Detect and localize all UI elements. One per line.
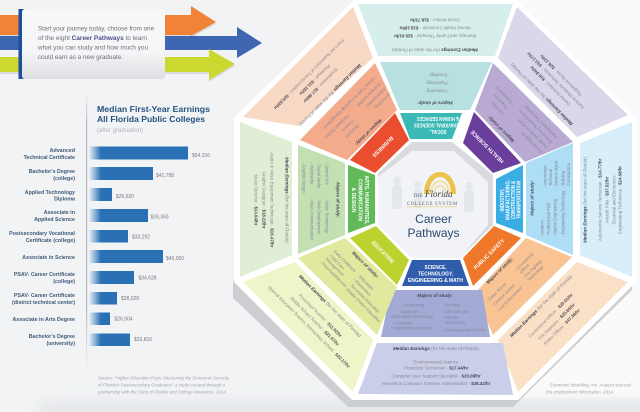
panel: arts, humanities, communication and design — [240, 122, 375, 277]
label: social — [414, 115, 462, 134]
earnings: science: Environmental Science — [414, 360, 459, 364]
majors: public safety: - Fire Fighting — [521, 258, 543, 280]
bar: associate in arts — [12, 312, 133, 325]
earnings: industry — [582, 157, 622, 243]
earnings: social: Median Earnings (for the state of Florida) — [392, 48, 478, 52]
label: public safety: PUBLIC SAFETY — [473, 238, 507, 271]
bar: applied technology diploma: $26,620 — [116, 194, 134, 200]
earnings: public safety: Police Officer - $47.38/hr — [543, 308, 581, 346]
earnings: social: Marriage and Family Therapist - $20.01/hr — [394, 34, 476, 38]
panel: health science — [463, 7, 628, 173]
bar: bachelor's university: (university) — [46, 341, 75, 347]
chart heading: All Florida Public Colleges — [97, 115, 206, 124]
bar: bachelor's college: (college) — [53, 176, 75, 182]
intro card — [22, 9, 165, 79]
majors: social: - Sociology — [429, 72, 450, 78]
majors: arts: - Liberal Arts — [324, 162, 330, 185]
bar: PSAV college: PSAV- Career Certificate — [14, 272, 75, 278]
earnings: arts — [254, 153, 290, 248]
earnings: public safety — [509, 274, 594, 359]
bar: applied technology diploma — [25, 188, 134, 202]
bar: postsecondary vocational: Postsecondary Vocational — [9, 231, 76, 237]
majors: public safety: Majors of study: — [485, 256, 514, 285]
majors: education: - Early Childhood — [331, 247, 357, 274]
intro card: Start your journey today, choose from one — [38, 26, 155, 32]
majors: industry: - Engineering Technology — [560, 190, 566, 237]
logo wordmark: Florida — [424, 189, 453, 199]
panel: social and human services — [358, 4, 513, 139]
majors: business: - Finance — [341, 117, 357, 133]
label: industry: INDUSTRY, — [500, 188, 506, 212]
earnings: business: First-Line Supervisor of Transportation - $24.83/hr — [273, 38, 345, 111]
chart heading — [97, 105, 211, 134]
majors: industry: Majors of study: — [530, 180, 534, 216]
majors: business: & Management — [322, 107, 346, 130]
center title — [407, 212, 460, 240]
bar: bachelor's university: Bachelor's Degree — [29, 334, 75, 340]
majors: arts: - Web Development — [316, 198, 322, 235]
majors: arts: - Digital Media — [316, 162, 322, 189]
majors: health science: Majors of study: — [486, 114, 515, 143]
bar: PSAV college — [14, 271, 157, 285]
label: social: BEHAVIORAL SCIENCES — [414, 122, 462, 128]
bar: associate in science: $45,050 — [166, 256, 184, 262]
earnings: business — [273, 38, 366, 131]
bar: advanced technical certificate — [24, 146, 210, 161]
earnings: business: Bookkeeper - $17.96/hr — [302, 67, 339, 104]
label: science: TECHNOLOGY, — [418, 272, 453, 278]
chart heading: Median First-Year Earnings — [97, 105, 211, 114]
majors: public safety — [476, 243, 547, 313]
majors: industry: - Professional Pilot — [546, 202, 551, 237]
majors: science: - Computer — [398, 309, 419, 314]
bar: postsecondary vocational: $33,292 — [132, 234, 150, 240]
earnings: arts: Median Earnings (for the state of Florida) — [284, 157, 290, 243]
attribution — [546, 382, 632, 394]
source note — [97, 376, 230, 394]
majors: public safety: - Criminal Justice — [490, 282, 516, 308]
earnings: health science: Registered Nurse - $26.13/hr — [539, 53, 583, 97]
bar: bachelor's college: $41,798 — [156, 173, 174, 179]
label: arts: ARTS, HUMANITIES, — [363, 176, 369, 225]
bar: advanced technical certificate: Technical Certificate — [24, 155, 75, 161]
majors: health science: - Pharmacy — [491, 93, 510, 112]
center title: Pathways — [407, 226, 460, 240]
earnings: science: Network & Computer Systems Administrator - $38.42/hr — [382, 381, 491, 386]
majors: business: - Administration — [365, 85, 389, 109]
bar: PSAV district: PSAV- Career Certificate — [14, 293, 75, 299]
majors: social: Majors of study: — [417, 100, 453, 106]
majors: public safety: Technology — [526, 263, 545, 282]
panel: industry, manufacturing, construction and transportation — [496, 122, 632, 277]
earnings: science: Median Earnings (for the state of Florida) — [393, 346, 479, 351]
panel: public safety — [463, 226, 628, 392]
label: industry: CONSTRUCTION & — [511, 181, 517, 219]
bar: postsecondary vocational — [9, 230, 150, 244]
label: business: BUSINESS — [370, 135, 394, 158]
panel: business — [243, 7, 409, 173]
majors: health science: - Nursing — [490, 101, 506, 117]
bar: associate in applied science: $39,360 — [150, 214, 169, 220]
majors: education: Majors of study: — [351, 250, 380, 279]
bar: advanced technical certificate: Advanced — [50, 148, 75, 154]
label: arts: COMMUNICATION — [356, 179, 362, 221]
label: social: & HUMAN SERVICES — [417, 115, 459, 121]
bar: PSAV college: $34,628 — [138, 276, 157, 282]
earnings: education: Preschool Teacher - $11.02/hr — [298, 293, 343, 338]
bar: bachelor's college: Bachelor's Degree — [29, 169, 75, 175]
majors: social — [417, 72, 453, 106]
logo arcs — [426, 174, 454, 194]
majors: health science: - Health Services Mgmt — [516, 117, 550, 151]
bar: applied technology diploma: Diploma — [54, 196, 75, 202]
bar: PSAV district: $28,028 — [121, 296, 139, 302]
majors: public safety: Officer — [518, 262, 531, 275]
bar: associate in arts: $26,504 — [114, 316, 133, 322]
majors: science: Programming/Analysis — [391, 326, 432, 330]
earnings: public safety: Correctional Officer - $20.01/hr — [527, 292, 574, 339]
label: industry: TRANSPORTATION — [516, 181, 522, 219]
earnings: arts: Music Director - $14.04/hr — [254, 174, 258, 226]
label: science — [408, 265, 463, 284]
majors: business: Majors of study: — [354, 118, 383, 147]
majors: public safety: - Correctional — [513, 251, 534, 272]
majors: business: - Paralegal Studies — [324, 112, 352, 140]
bar: associate in science — [22, 250, 184, 263]
earnings: business: Median Earnings (for the state of Florida) — [298, 63, 362, 127]
bar: applied technology diploma: Applied Technology — [25, 190, 75, 196]
bar: bachelor's university: $33,816 — [134, 337, 152, 343]
label: health science: HEALTH SCIENCE — [470, 128, 505, 164]
majors: arts: Majors of study: — [336, 182, 340, 218]
majors: science: - Life Sciences — [442, 309, 469, 314]
arrows behind intro card — [0, 6, 262, 82]
earnings: public safety: Median Earnings (for the state of Florida) — [509, 274, 573, 338]
majors: science: Networking — [445, 320, 466, 325]
earnings: health science: Median Earnings (for the state of Florida) — [509, 62, 574, 126]
bar: associate in applied science — [34, 209, 169, 223]
bar chart: median earnings — [9, 95, 210, 375]
earnings: arts: Graphic Designer - $18.22/hr — [262, 171, 266, 229]
majors: science: Majors of study: — [417, 293, 453, 298]
majors: business: - Accounting — [373, 90, 393, 110]
majors: health science: - Emergency Medical Svcs — [517, 109, 555, 146]
majors: industry: - Marine Engineering — [552, 198, 558, 237]
source note: Source: "Higher Education Pays: Measuring the Economic Security — [98, 376, 230, 380]
label: industry: MANUFACTURING, — [506, 180, 512, 220]
center title: Career — [415, 212, 452, 226]
earnings: health science — [509, 43, 593, 126]
majors: business: - Global Trade & Logistics — [341, 75, 378, 111]
earnings: industry: Electrical and Electronics — [612, 175, 616, 225]
logo wordmark — [407, 189, 458, 207]
bar: associate in science: Associate in Science — [22, 255, 75, 261]
majors: industry: - Automotive — [542, 165, 548, 188]
majors: social: - Counseling — [426, 88, 450, 94]
earnings: business: Paralegal - $21.18/hr — [298, 63, 331, 96]
majors: industry: Construction — [566, 162, 571, 186]
intro card: of the eight Career Pathways to learn — [38, 36, 147, 42]
bar: PSAV district — [12, 292, 139, 306]
silhouettes — [392, 177, 474, 212]
attribution: the employment information, 2014 — [546, 390, 614, 394]
majors: science — [391, 293, 487, 332]
earnings: education — [267, 264, 372, 369]
majors: education: - Education — [357, 273, 375, 291]
majors: business: - Business — [345, 122, 362, 139]
earnings: health science: Nuclear Medicine Technician - $32.17/hr — [526, 51, 585, 110]
majors: education: - Secondary Education — [348, 281, 381, 315]
attribution: Economic Modeling, Inc. Analyst sourced — [550, 382, 632, 388]
bar: postsecondary vocational: Certificate (college) — [26, 238, 75, 244]
majors: science: - Pre-Med — [442, 302, 461, 308]
bar: associate in arts: Associate in Arts Degree — [12, 317, 75, 323]
source note: partnership with the State of Florida and College Measures, 2014. — [97, 390, 227, 394]
earnings: science — [382, 346, 491, 386]
majors: science: - Engineering — [400, 302, 425, 308]
bar: advanced technical certificate: $54,316 — [192, 153, 210, 159]
majors: public safety: - Crime Scene — [485, 281, 508, 304]
central octagon — [378, 142, 493, 258]
majors: education: - Middle Grades Education — [344, 286, 382, 324]
bar: PSAV district: (district technical center) — [12, 300, 75, 306]
earnings: science: Protection Technician - $17.44/hr — [404, 366, 469, 370]
majors: education — [318, 239, 403, 324]
majors: health science: - Radiography Technology — [522, 104, 560, 141]
majors: business — [318, 75, 402, 159]
earnings: industry: Engineering Technician - $24.68/hr — [618, 166, 622, 234]
logo wordmark: THE — [413, 194, 423, 199]
label: science: SCIENCE, — [424, 265, 447, 271]
panel: education — [243, 226, 409, 392]
majors: arts: - Music Technology — [324, 198, 330, 234]
majors: arts: - Mass Communication — [310, 198, 314, 241]
majors: science: - Environmental Science — [442, 328, 487, 332]
earnings: health science: Dental Assistant - $16.94/hr — [529, 65, 571, 107]
earnings: education: Special Education Teacher, Elementary School - $22.17/hr — [267, 285, 351, 369]
majors: health science: - Sonography — [494, 85, 515, 107]
majors: science: - Computer — [392, 320, 413, 326]
majors: arts: - Graphic Design — [302, 162, 306, 193]
bar: associate in applied science: Associate in — [44, 210, 75, 216]
earnings: education: Median Earnings (for the state of Florida) — [298, 274, 362, 338]
bar: PSAV college: (college) — [53, 279, 75, 285]
bar: bachelor's university — [29, 334, 152, 347]
label: social: SOCIAL, — [429, 128, 446, 134]
majors: health science — [475, 80, 560, 165]
majors: health science: - Dental Hygiene — [520, 131, 545, 156]
earnings: science: Computer User Support Specialist - $20.08/hr — [391, 374, 481, 378]
label: education: EDUCATION — [370, 240, 395, 265]
majors: industry: Service Mgmt — [554, 160, 558, 186]
earnings: social: Mental Health Counselor - $18.18/hr — [399, 26, 471, 30]
label: arts — [350, 176, 369, 225]
source note: of Florida's Postsecondary Graduates" a study created through a — [98, 382, 226, 388]
intro card: what you can study and how much you — [37, 46, 148, 52]
panel: science, technology, engineering and math — [358, 260, 513, 395]
logo wordmark: COLLEGE SYSTEM — [407, 202, 458, 207]
label: science: ENGINEERING & MATH — [408, 278, 463, 284]
majors: industry: - Building — [560, 170, 566, 188]
chart heading: (after graduation) — [97, 128, 143, 134]
majors: arts: - Multimedia — [310, 162, 314, 185]
bar: bachelor's college — [29, 167, 174, 182]
majors: public safety: - Law Enforcement — [495, 285, 523, 313]
majors: education: - Preschool/Director — [319, 259, 349, 289]
majors: industry: Technical — [548, 169, 553, 186]
majors: industry: - Aviation — [540, 220, 544, 237]
earnings: industry: Automotive Service Technician - $14.77/hr — [598, 158, 602, 241]
octagon base and shadow — [233, 0, 636, 407]
earnings: social: Social Worker - $18.73/hr — [410, 18, 460, 22]
majors: education: Management — [325, 257, 346, 278]
majors: business: - Entrepreneurship — [356, 80, 384, 108]
majors: education: - Elementary — [352, 277, 373, 298]
majors: science: Information Technology — [391, 314, 434, 319]
label: industry — [500, 180, 522, 220]
earnings: industry: Aircraft Pilot - $37.52/hr — [604, 176, 610, 223]
earnings: arts: Audio & Video Equipment Technician - $16.47/hr — [270, 153, 274, 248]
earnings: public safety: Fire Inspector - $25.65/hr — [537, 302, 576, 341]
earnings: education: Middle School Teacher - $21.67/hr — [289, 296, 341, 347]
majors: arts — [302, 162, 340, 241]
earnings: social — [392, 18, 478, 52]
label: arts: & DESIGN — [350, 188, 356, 213]
intro card: could earn as a new graduate. — [38, 55, 123, 61]
majors: education: - Child Care — [327, 252, 346, 271]
majors: industry — [530, 160, 571, 237]
bar: associate in applied science: Applied Science — [34, 217, 75, 223]
majors: social: - Psychology — [426, 80, 450, 86]
majors: science: - Internet — [442, 315, 459, 320]
earnings: industry: Median Earnings (for the state of Florida) — [582, 157, 588, 243]
